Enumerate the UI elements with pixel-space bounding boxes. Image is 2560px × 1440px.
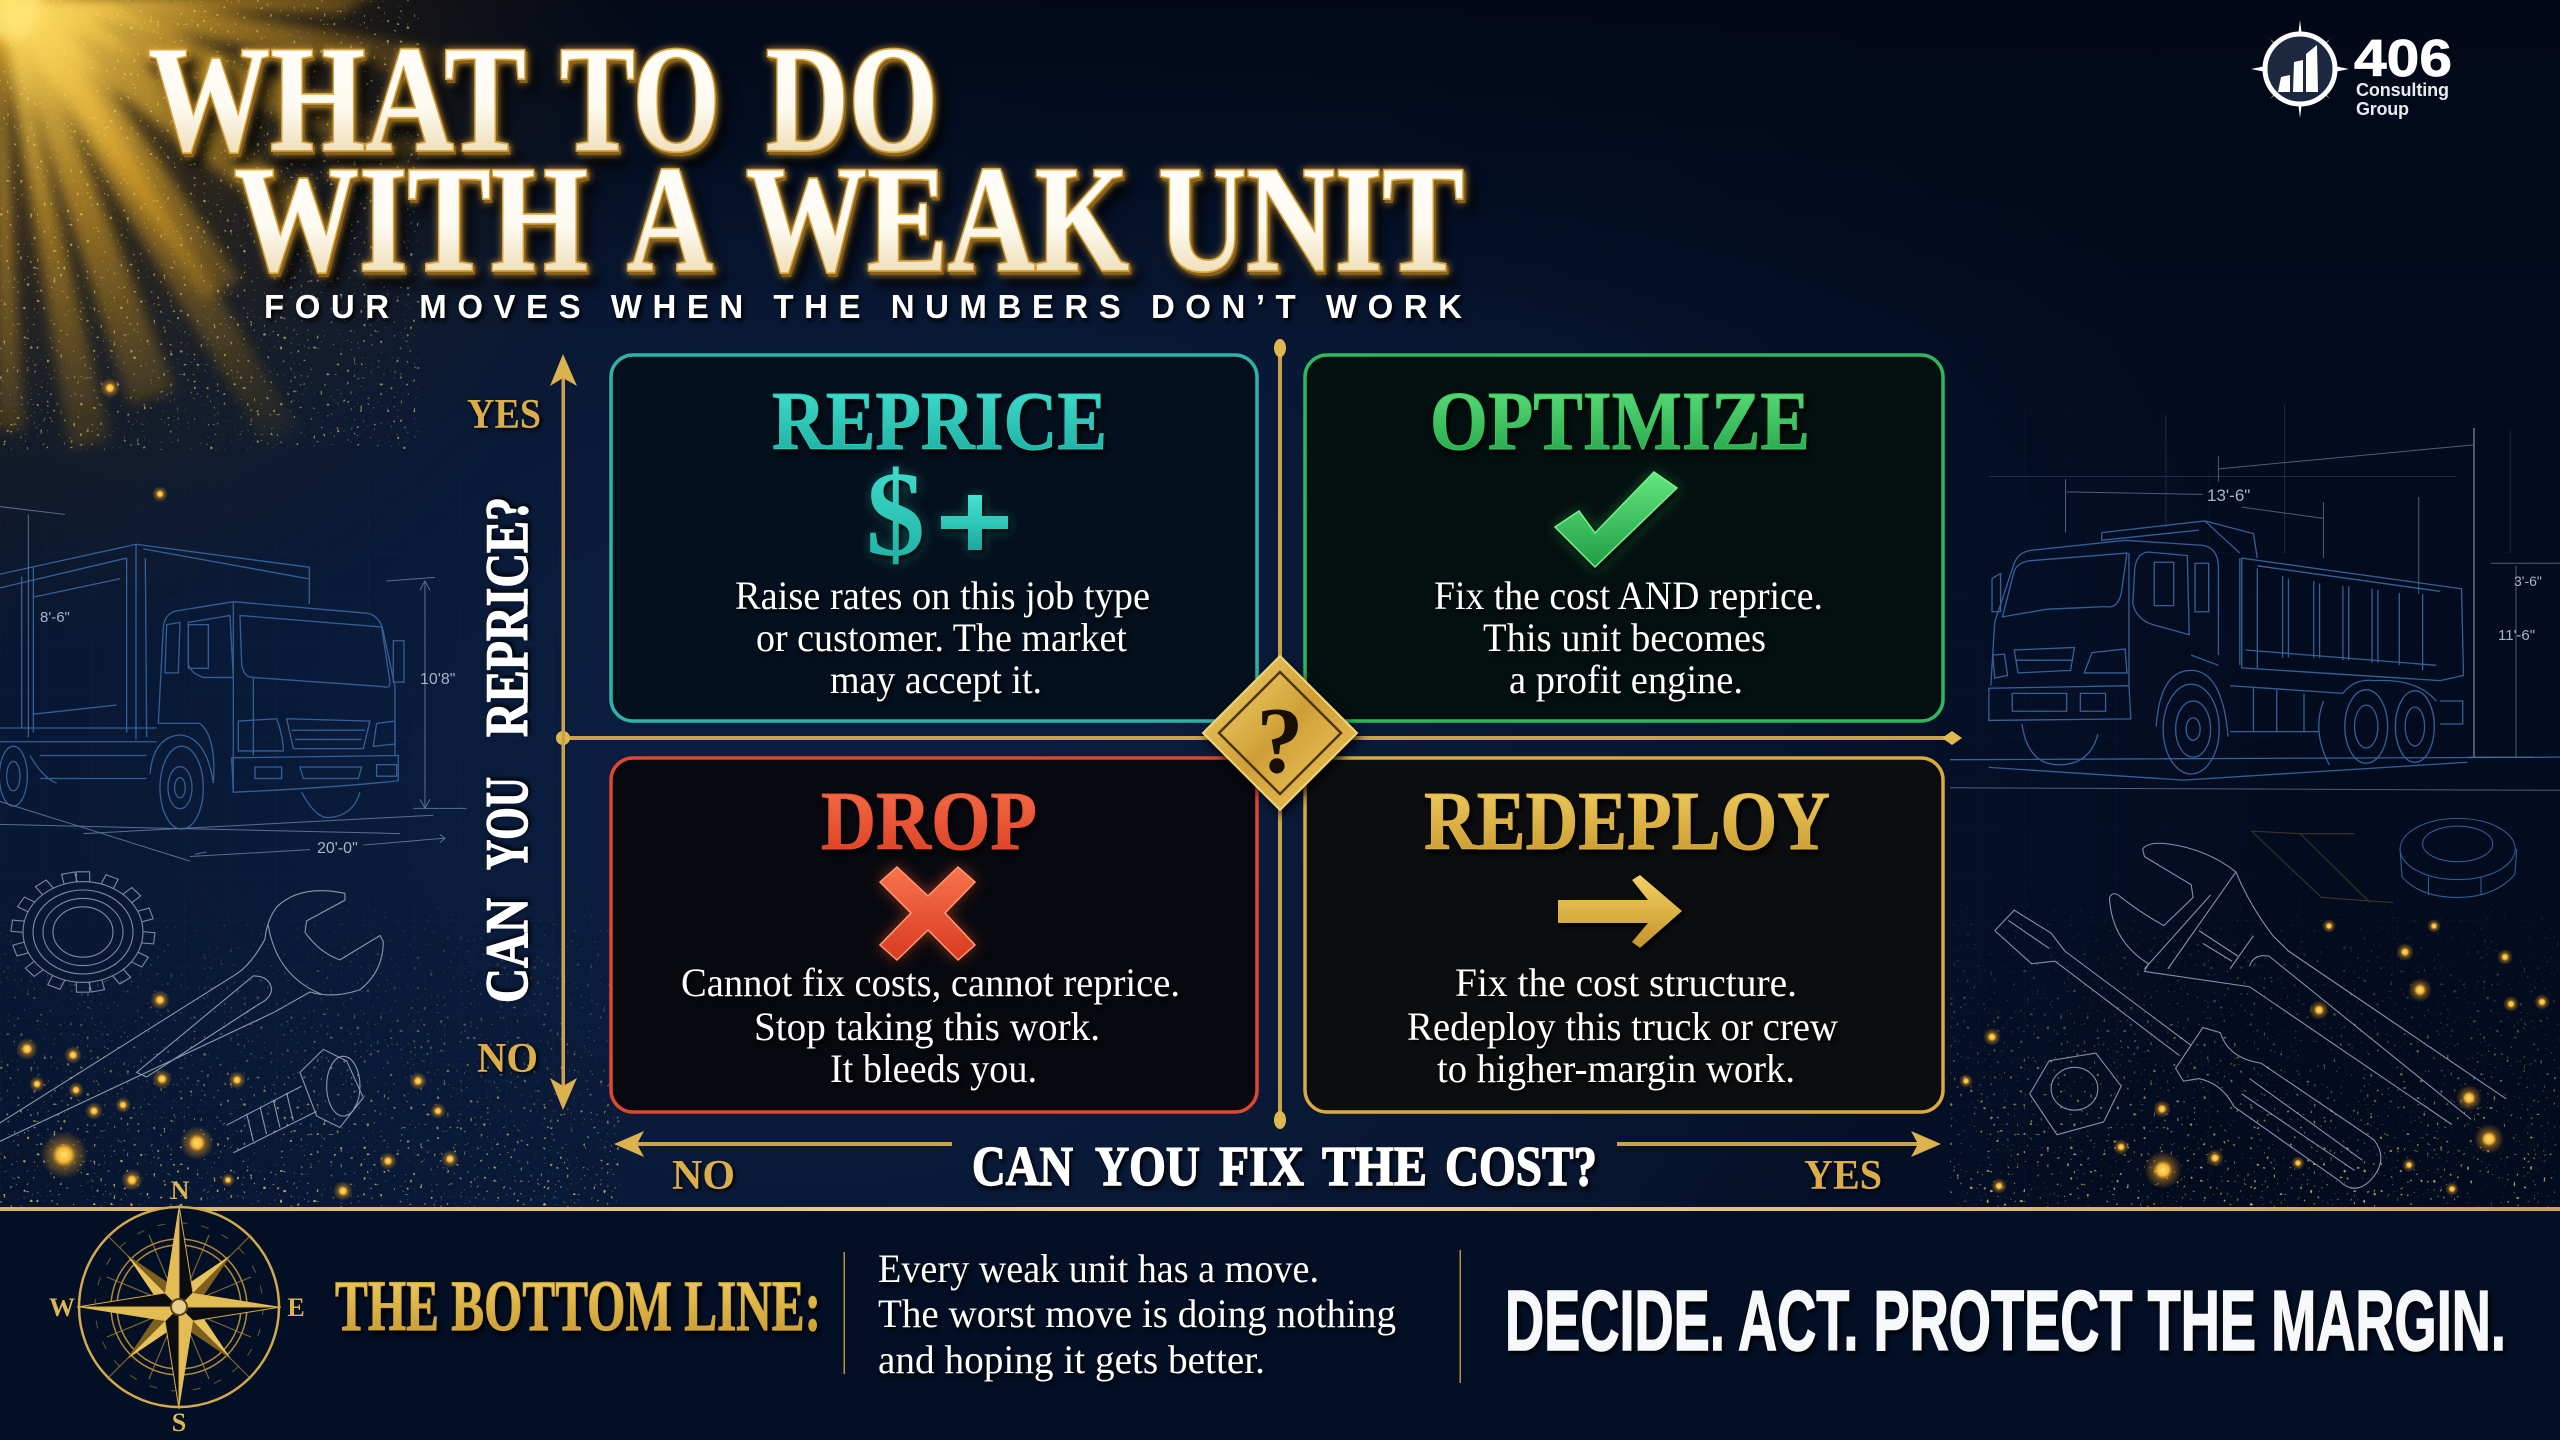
title: WITH <box>234 135 588 303</box>
logo: 406 Consulting Group: 406 <box>2354 30 2452 88</box>
heading: drop: DROP <box>821 775 1037 868</box>
text: reprice description: or customer. The market <box>756 615 1127 660</box>
bottom line text: The worst move is doing nothing <box>878 1291 1396 1336</box>
golden light rays <box>0 0 680 680</box>
bottom line text: Every weak unit has a move. <box>878 1246 1319 1291</box>
axis label: can you reprice: CAN <box>474 898 540 1003</box>
icon: dollar plus <box>866 447 1008 582</box>
heading: reprice: REPRICE <box>772 375 1107 468</box>
blueprint labels: right: 13'-6" <box>2207 486 2250 505</box>
heading: redeploy: REDEPLOY <box>1424 775 1830 868</box>
text: optimize description: This unit becomes <box>1483 615 1766 660</box>
logo: 406 Consulting Group <box>2251 20 2452 119</box>
text: drop description: It bleeds you. <box>830 1046 1037 1091</box>
blueprint labels: right: 11'-6" <box>2498 627 2535 644</box>
axis label: can you fix the cost: THE <box>1322 1136 1427 1198</box>
text: redeploy description: to higher-margin work. <box>1437 1046 1795 1091</box>
icon: compass <box>49 1176 305 1437</box>
axis label: can you reprice <box>474 497 540 1003</box>
icon: compass: E <box>287 1293 305 1322</box>
divider two <box>1460 1250 1461 1383</box>
panel: optimize <box>1305 355 1943 721</box>
bottom line text <box>878 1246 1396 1382</box>
text: redeploy description <box>1407 960 1838 1091</box>
center diamond: question mark: ? <box>1256 689 1304 793</box>
title: UNIT <box>1158 135 1464 303</box>
axis label: can you fix the cost: FIX <box>1219 1136 1304 1198</box>
cross axis lines <box>556 339 1962 1129</box>
icon: compass chart <box>2251 20 2349 118</box>
bottom line label: THE BOTTOM LINE: <box>335 1266 821 1346</box>
blueprint labels: right <box>2207 486 2542 644</box>
text: optimize description: a profit engine. <box>1509 657 1743 702</box>
glowing gold particles <box>16 486 2550 1201</box>
text: drop description: Stop taking this work. <box>754 1004 1100 1049</box>
blueprint truck: left <box>0 507 467 861</box>
bottom band <box>0 1207 2560 1440</box>
blueprint tools: right <box>1995 818 2517 1188</box>
text: redeploy description: Redeploy this truck or crew <box>1407 1004 1838 1049</box>
text: reprice description <box>735 573 1150 702</box>
title: A <box>627 135 713 303</box>
text: reprice description: may accept it. <box>830 657 1042 702</box>
panel: drop <box>611 758 1257 1112</box>
icon: compass: S <box>172 1408 186 1437</box>
icon: compass: N <box>171 1176 190 1205</box>
logo: 406 Consulting Group: Consulting <box>2356 80 2449 100</box>
blueprint labels: left <box>40 609 455 857</box>
icon: dollar plus: $ <box>866 447 925 582</box>
text: redeploy description: Fix the cost structure. <box>1455 960 1797 1005</box>
text: optimize description <box>1434 573 1823 702</box>
title: WHAT <box>148 15 526 183</box>
panel: reprice <box>611 355 1257 721</box>
axis label: can you fix the cost: COST? <box>1445 1136 1597 1198</box>
text: reprice description: Raise rates on this job type <box>735 573 1150 618</box>
title <box>148 15 1464 303</box>
title: DO <box>766 15 938 183</box>
axis label: can you fix the cost: YOU <box>1095 1136 1200 1198</box>
blueprint labels: left: 20'-0" <box>317 840 358 857</box>
vertical axis arrow <box>550 354 577 1110</box>
gold dust particles <box>0 880 2560 1210</box>
text: drop description <box>681 960 1180 1091</box>
blueprint truck: right <box>1950 405 2560 790</box>
axis label: yes vertical: YES <box>467 392 541 438</box>
icon: compass: W <box>49 1293 75 1322</box>
axis label: no horizontal: NO <box>672 1153 735 1199</box>
subtitle: FOUR MOVES WHEN THE NUMBERS DON’T WORK <box>264 288 1462 325</box>
heading: optimize: OPTIMIZE <box>1430 375 1810 468</box>
icon: red x <box>880 867 975 960</box>
axis label: can you reprice: YOU <box>474 777 540 870</box>
axis label: no vertical: NO <box>477 1036 538 1082</box>
axis label: can you fix the cost <box>972 1136 1597 1198</box>
panel: redeploy <box>1305 758 1943 1112</box>
title: WEAK <box>746 135 1129 303</box>
icon: check mark <box>1555 472 1677 567</box>
blueprint labels: left: 10'8" <box>420 671 455 688</box>
axis label: can you reprice: REPRICE? <box>474 497 540 737</box>
blueprint labels: right: 3'-6" <box>2514 573 2542 589</box>
bottom line text: and hoping it gets better. <box>878 1337 1265 1382</box>
logo: 406 Consulting Group: Group <box>2356 99 2409 119</box>
text: drop description: Cannot fix costs, cannot reprice. <box>681 960 1180 1005</box>
blueprint wrench and bolt: left <box>0 891 383 1153</box>
title: TO <box>560 15 720 183</box>
text: optimize description: Fix the cost AND reprice. <box>1434 573 1823 618</box>
blueprint gear <box>11 872 155 992</box>
axis label: can you fix the cost: CAN <box>972 1136 1073 1198</box>
blueprint labels: left: 8'-6" <box>40 609 70 626</box>
center diamond: question mark <box>1203 656 1357 810</box>
divider one <box>844 1252 845 1374</box>
axis label: yes horizontal: YES <box>1804 1153 1882 1199</box>
icon: gold arrow <box>1558 875 1682 948</box>
horizontal axis arrows <box>614 1131 1941 1157</box>
